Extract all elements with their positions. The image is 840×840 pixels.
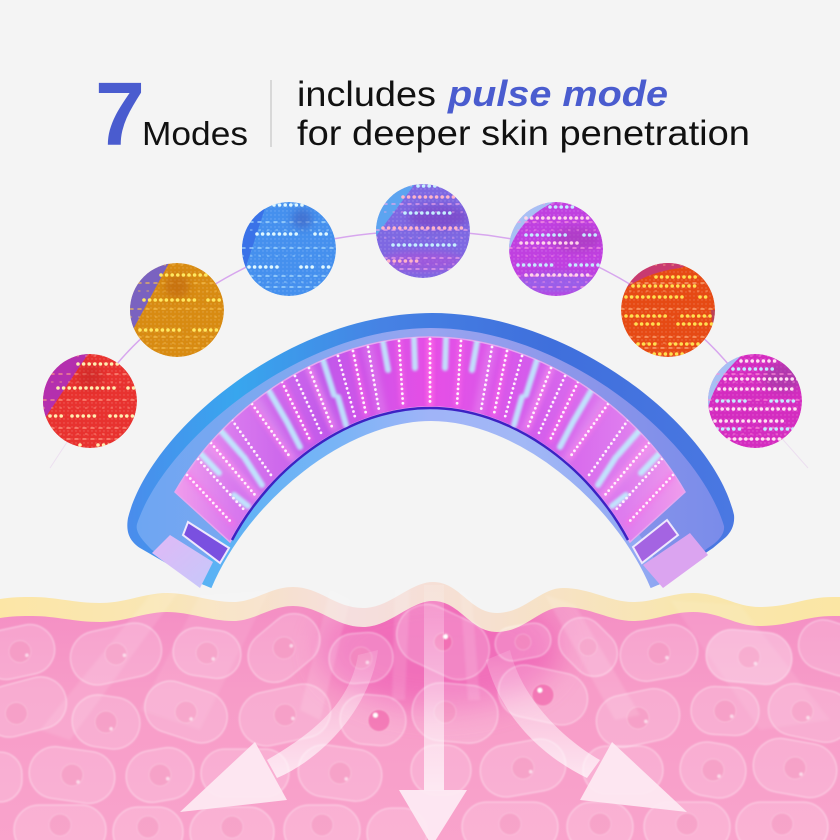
arrow: left xyxy=(180,650,378,812)
arrow: right xyxy=(486,650,687,812)
dermis xyxy=(0,601,840,840)
circle: blue mode xyxy=(242,202,336,296)
line: for deeper skin penetration: for deeper skin penetration xyxy=(297,114,750,153)
circle: magenta mode xyxy=(509,202,603,296)
left connector xyxy=(152,522,229,588)
light mode circles xyxy=(43,184,803,448)
LED device xyxy=(127,313,734,588)
circle: pink mode xyxy=(708,354,803,448)
arrow: centre xyxy=(399,585,467,840)
shell inner band xyxy=(137,328,724,585)
hot glow at centre xyxy=(320,590,560,710)
line: includes pulse mode: includes xyxy=(297,75,436,114)
circle: red mode xyxy=(43,354,137,448)
LED panel xyxy=(175,337,685,542)
line: includes pulse mode: pulse mode xyxy=(447,73,668,114)
label: Modes: Modes xyxy=(142,115,248,152)
skin surface layer xyxy=(0,582,840,840)
headline xyxy=(95,65,750,165)
large number 7: 7 xyxy=(95,65,145,165)
skin cross-section xyxy=(0,582,840,840)
line: includes pulse mode xyxy=(297,73,668,114)
circle: orange red mode xyxy=(621,263,715,357)
inner rim xyxy=(204,413,658,585)
skin cells xyxy=(0,595,840,840)
circle: violet mode xyxy=(376,184,470,278)
connecting arc xyxy=(50,231,808,468)
device shell xyxy=(127,313,734,585)
light beams xyxy=(40,590,830,740)
right connector xyxy=(633,520,708,588)
circle: amber mode xyxy=(130,263,224,357)
